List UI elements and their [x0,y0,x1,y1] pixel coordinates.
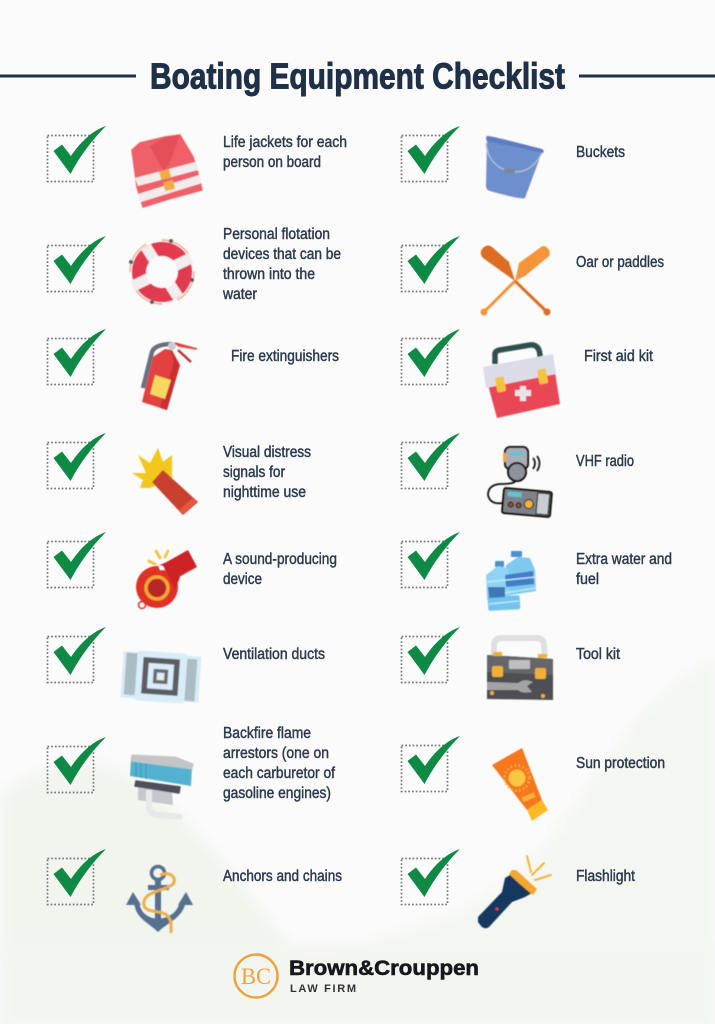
text: backfire flame arrestors [223,725,336,802]
text: ventilation ducts: Ventilation ducts [223,646,325,663]
text: visual distress signals: Visual distress [223,444,311,461]
text: first aid: First aid kit [584,348,654,365]
icon: sunscreen tube [492,748,548,821]
text: water and fuel: Extra water and [576,551,672,568]
text: tool kit: Tool kit [576,646,621,663]
icon: whistle [136,550,197,608]
icon: water bottles [486,551,536,611]
text: water and fuel [576,551,672,588]
icon: tool kit [487,638,553,700]
icon: VHF radio [488,447,552,517]
text: fire extinguishers: Fire extinguishers [231,348,339,365]
logo: LAW FIRM [290,983,356,995]
text: flashlight: Flashlight [576,868,636,885]
text: life jackets: Life jackets for each [223,134,347,151]
text: anchors: Anchors and chains [223,868,342,885]
text: sun protection: Sun protection [576,755,665,772]
text: oars: Oar or paddles [576,254,664,271]
logo [234,954,479,998]
text: flotation devices: devices that can be [223,246,341,263]
text: buckets: Buckets [576,144,625,161]
icon: life jacket [132,135,202,207]
icon: fire extinguisher [142,342,197,410]
text: backfire flame arrestors: arrestors (one on [223,745,329,762]
text: backfire flame arrestors: each carburetor of [223,765,336,782]
icon: ventilation duct [120,649,202,705]
icon: distress flare [132,448,197,514]
text: sound device: device [223,571,262,588]
text: flotation devices: water [222,286,257,303]
logo: Brown&Crouppen [289,957,479,980]
logo: BC [241,964,271,989]
text: backfire flame arrestors: gasoline engines) [223,785,331,802]
icon: anchor [126,866,193,933]
checkbox column: left [48,126,106,904]
text: flotation devices [222,226,341,303]
text: life jackets: person on board [223,154,321,171]
text: sound device [223,551,337,588]
text: vhf: VHF radio [576,453,634,470]
text: water and fuel: fuel [576,571,599,588]
icon: flame arrestor [130,755,193,817]
title [0,56,715,96]
text: sound device: A sound-producing [223,551,337,568]
title: Boating Equipment Checklist [150,56,565,96]
text: backfire flame arrestors: Backfire flame [223,725,311,742]
icon: first aid kit [483,345,560,418]
text: visual distress signals [223,444,311,501]
text: life jackets [223,134,347,171]
text: flotation devices: thrown into the [223,266,315,283]
checkbox column: right [402,126,460,904]
icon: bucket [486,136,544,198]
text: flotation devices: Personal flotation [223,226,330,243]
icon: life ring [129,239,194,304]
text: visual distress signals: signals for [223,464,285,481]
icon: flashlight [478,856,551,928]
icon: oars [480,246,550,316]
text: visual distress signals: nighttime use [223,484,306,501]
